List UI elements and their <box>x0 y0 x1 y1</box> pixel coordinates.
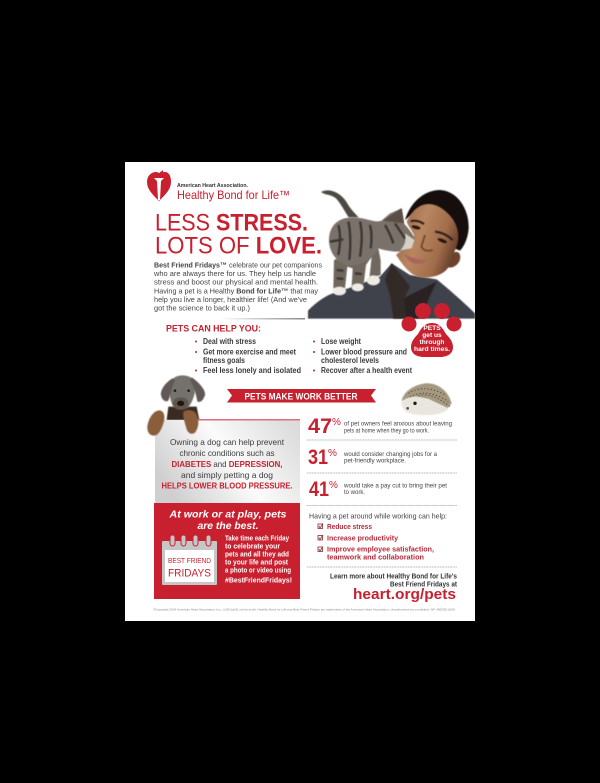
stat: 31 percent <box>308 446 437 469</box>
red panel text: a photo or video using <box>225 568 291 574</box>
panel text: Owning a dog can help prevent <box>170 437 285 447</box>
cat ear <box>383 208 404 223</box>
panel text: and simply petting a dog <box>181 470 273 480</box>
benefits list: Lose weight <box>321 337 361 346</box>
man: hair <box>405 190 469 251</box>
logo organisation name: American Heart Association. <box>177 183 248 189</box>
cat legs <box>333 248 381 288</box>
headline line 2: LOTS OF LOVE. <box>155 232 322 260</box>
man: brows <box>411 221 453 240</box>
paw text: get us <box>422 332 442 339</box>
photo: man with cat <box>308 190 475 319</box>
benefits list: Get more exercise and meet <box>203 348 296 356</box>
red panel heading: are the best. <box>198 520 259 532</box>
heading: pets can help you: PETS CAN HELP YOU: <box>166 324 261 334</box>
man: shirt <box>308 263 475 319</box>
stat description: would take a pay cut to bring their pet <box>343 482 447 490</box>
calendar text: BEST FRIEND <box>168 556 212 565</box>
cat tail <box>321 190 359 217</box>
paw text: hard times. <box>414 346 450 353</box>
dog eyes <box>174 389 190 392</box>
call to action <box>330 572 457 603</box>
red panel text: to your life and post <box>225 560 289 566</box>
stat number: 31 <box>308 446 328 469</box>
panel top edge <box>197 419 300 420</box>
stat description: would consider changing jobs for a <box>343 451 437 458</box>
stat number: 41 <box>309 478 329 501</box>
dog paws <box>147 410 198 436</box>
benefits list <box>195 337 412 375</box>
benefits bullets <box>195 340 315 372</box>
intro paragraph: got the science to back it up.) <box>154 304 250 312</box>
stat description: pet-friendly workplace. <box>344 458 406 464</box>
calendar frame <box>162 541 217 585</box>
stat: 41 percent <box>309 478 447 501</box>
man: eyes <box>411 225 448 244</box>
checklist items: teamwork and collaboration <box>327 552 424 562</box>
white sheet <box>125 162 475 621</box>
intro paragraph: help you live a longer, healthier life! (And we've <box>154 295 307 304</box>
call to action text <box>330 572 457 588</box>
panel: dog facts <box>147 410 300 503</box>
paw text: through <box>420 339 444 346</box>
hedgehog spines <box>402 383 452 409</box>
calendar text: FRIDAYS <box>168 568 211 580</box>
man: open collar <box>385 263 410 319</box>
red panel heading: At work or at play, pets <box>168 508 287 520</box>
cat muzzle <box>400 233 415 251</box>
man: mouth <box>404 254 427 264</box>
panel text: chronic conditions such as <box>180 448 274 458</box>
footer legal text: ©Copyright 2024 American Heart Association, Inc., a 501(c)(3) not-for-profit. Healthy Bond for Life and Best Friend Fridays are trademarks of the American Heart Association. Unauthorized use prohibited. WF 490298 10/24 <box>153 608 455 612</box>
checklist intro: Having a pet around while working can help: <box>309 512 447 520</box>
stat description: of pet owners feel anxious about leaving <box>344 420 452 428</box>
red panel text <box>225 536 292 584</box>
paw print callout <box>402 303 462 357</box>
logo <box>147 170 290 202</box>
red panel text: Take time each Friday <box>225 536 289 542</box>
logo programme name: Healthy Bond for Life™ <box>177 188 290 202</box>
intro paragraph: who are always there for us. They help us handle <box>153 269 316 278</box>
dog ears <box>161 377 205 402</box>
red panel heading <box>168 508 287 532</box>
dog nose <box>177 401 184 406</box>
man: nose <box>421 235 433 251</box>
red panel text: pets and all they add <box>225 552 289 558</box>
paw text <box>414 325 450 353</box>
web address: heart.org/pets <box>353 586 456 603</box>
calendar page <box>165 550 214 582</box>
benefits list: Lower blood pressure and <box>321 348 407 356</box>
photo: dog <box>161 375 205 420</box>
checklist items: Reduce stress <box>327 522 372 531</box>
benefits list: Feel less lonely and isolated <box>203 366 301 375</box>
red background <box>154 503 300 599</box>
call to action text: Learn more about Healthy Bond for Life's <box>330 572 457 580</box>
photo: hedgehog <box>401 383 452 415</box>
hedgehog spine texture <box>408 389 450 407</box>
banner ribbon <box>227 389 376 402</box>
icon: check boxes <box>318 524 323 552</box>
stat percent sign: % <box>332 417 341 428</box>
intro paragraph: Best Friend Fridays™ celebrate our pet companions <box>154 260 322 270</box>
man: face <box>396 204 460 278</box>
hedgehog face and belly <box>401 397 448 415</box>
benefits list: Recover after a health event <box>321 366 412 375</box>
red panel text: to celebrate your <box>225 544 280 550</box>
stat description <box>343 482 447 496</box>
working with pets checklist <box>309 512 447 562</box>
checklist items <box>327 522 434 562</box>
dog head <box>169 375 195 409</box>
hedgehog eye <box>413 402 417 405</box>
stat description: to work. <box>344 489 365 496</box>
banner text: PETS MAKE WORK BETTER <box>244 392 358 402</box>
panel background <box>155 420 300 503</box>
panel: best friend fridays <box>154 503 300 599</box>
calendar text <box>168 556 212 580</box>
call to action text: Best Friend Fridays at <box>390 580 457 588</box>
stat description <box>344 420 452 434</box>
cat paws <box>333 275 380 295</box>
man: undershirt <box>403 282 437 319</box>
hedgehog nose <box>406 407 409 410</box>
panel text: HELPS LOWER BLOOD PRESSURE. <box>162 480 292 490</box>
benefits list: fitness goals <box>203 356 246 365</box>
cat <box>321 190 415 295</box>
checklist items: Improve employee satisfaction, <box>327 544 434 554</box>
calendar rings <box>170 535 211 546</box>
stat percent sign: % <box>328 448 337 459</box>
cat stripes <box>330 222 405 279</box>
cat body <box>329 208 415 265</box>
banner: pets make work better <box>227 389 376 402</box>
panel text: DIABETES and DEPRESSION, <box>172 459 282 469</box>
stat number: 47 <box>308 415 332 438</box>
photo bottom rule <box>220 318 305 320</box>
intro paragraph <box>153 260 322 312</box>
paw shape <box>402 303 462 357</box>
dog chest <box>167 407 199 420</box>
stat description <box>343 451 437 464</box>
icon: calendar <box>162 535 217 585</box>
icon: heart and torch <box>147 170 171 201</box>
intro paragraph: stress and boost our physical and mental health. <box>154 278 318 286</box>
benefits list: cholesterol levels <box>321 356 380 365</box>
paw text: PETS <box>423 325 441 332</box>
checklist items: Increase productivity <box>327 534 399 542</box>
red panel text: #BestFriendFridays! <box>225 578 292 584</box>
intro paragraph: Having a pet is a Healthy Bond for Life™ that may <box>154 286 318 296</box>
dog muzzle <box>173 397 189 409</box>
stat description: pets at home when they go to work. <box>344 428 429 434</box>
stat percent sign: % <box>329 480 338 491</box>
panel text <box>162 437 292 490</box>
benefits list: Deal with stress <box>203 337 257 346</box>
headline <box>155 210 322 260</box>
stat: 47 percent <box>308 415 452 438</box>
headline line 1: LESS STRESS. <box>155 210 308 236</box>
